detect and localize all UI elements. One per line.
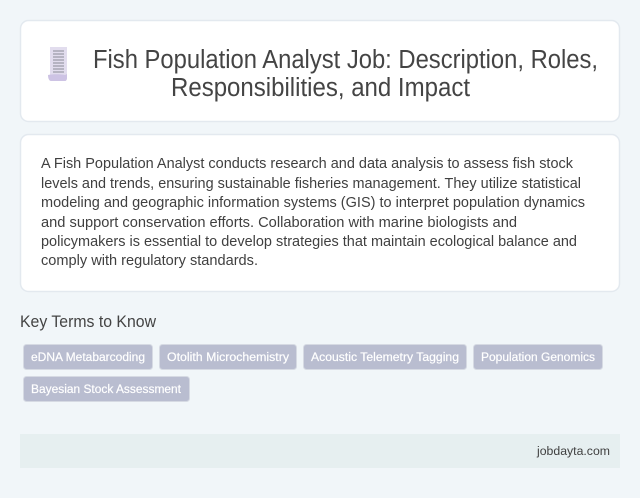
text block: description: comply with regulatory standards. [41,253,258,269]
text block: description: policymakers is essential to develop strategies that maintain ecological balance and [41,234,577,250]
title [93,46,598,102]
panel: description card [20,134,620,292]
panel: title card [20,20,620,122]
tag: Otolith Microchemistry: Otolith Microchemistry [167,350,290,364]
text block: description [41,156,585,269]
heading: key terms: Key Terms to Know [20,313,156,331]
footer: source: jobdayta.com [536,444,610,458]
icon: document [48,47,67,81]
tag: Population Genomics [474,344,602,370]
footer bar [20,434,620,468]
text block: description: A Fish Population Analyst conducts research and data analysis to assess fish stock [41,156,574,172]
tag: Acoustic Telemetry Tagging [304,344,466,370]
tag: Bayesian Stock Assessment: Bayesian Stock Assessment [31,382,182,396]
title: Responsibilities, and Impact [171,74,470,102]
title: Fish Population Analyst Job: Description, Roles, [93,46,598,74]
tag: Acoustic Telemetry Tagging: Acoustic Telemetry Tagging [311,350,459,364]
tag list [24,344,602,402]
text block: description: levels and trends, ensuring sustainable fisheries management. They utilize statistical [41,176,581,192]
text block: description: and support conservation efforts. Collaboration with marine biologists and [41,215,517,231]
tag: Otolith Microchemistry [160,344,296,370]
tag: Population Genomics: Population Genomics [481,350,595,364]
tag: eDNA Metabarcoding: eDNA Metabarcoding [31,350,145,364]
text block: description: modeling and geographic information systems (GIS) to interpret population dynamics [41,195,585,211]
tag: Bayesian Stock Assessment [24,376,190,402]
tag: eDNA Metabarcoding [24,344,152,370]
